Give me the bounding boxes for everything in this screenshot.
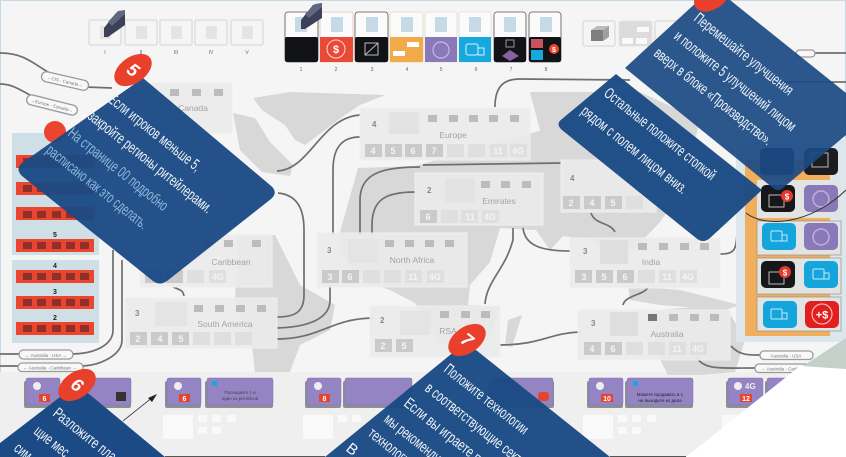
white corner and grey scrap [686, 338, 846, 457]
top track slots I-V: III [174, 50, 178, 56]
route labels: ←CIS - Canada→ [47, 75, 83, 88]
badge: step 7: 7 [457, 329, 478, 352]
top track slots I-V: V [245, 50, 249, 56]
region: India: 3 [583, 247, 588, 256]
production cards 1-8: 7 [510, 67, 513, 73]
badge: step 7 [442, 317, 492, 363]
region: North Africa [317, 233, 467, 287]
technology cards row: один из ретейлов [222, 395, 259, 401]
production cards 1-8 [285, 12, 561, 73]
region: RSA: RSA [439, 326, 457, 336]
production cards 1-8: 8 [545, 67, 548, 73]
region: India: 4G [682, 272, 694, 282]
region: Europe: 5 [390, 146, 396, 156]
panel: right upgrade board: +$ [816, 310, 828, 322]
region: South America: 4 [157, 334, 163, 344]
region: Europe: 4 [372, 120, 377, 129]
world map [233, 92, 745, 375]
production cards 1-8: 1 [300, 67, 303, 73]
panel: upgrades stack step [558, 74, 762, 241]
red circle marker [44, 121, 66, 143]
region: Europe: 7 [431, 146, 437, 156]
production cards 1-8: 3 [371, 67, 374, 73]
production cards 1-8: 2 [335, 67, 338, 73]
region: North Africa: 6 [347, 272, 353, 282]
region: India: 5 [601, 272, 607, 282]
route labels: Australia - USA [771, 354, 801, 358]
icon: dark cube on cards [301, 3, 322, 29]
production cards 1-8: $ [333, 44, 339, 56]
region: Asia: 5 [610, 198, 616, 208]
white slots under technology cards [163, 415, 752, 456]
panel: left retailer board [12, 121, 99, 343]
panel: step 7 [325, 342, 610, 457]
region: North Africa: 11 [408, 272, 418, 282]
panel: step 5: Если игроков меньше 5, [105, 91, 204, 175]
region: North Africa: North Africa [390, 255, 434, 265]
region: South America [125, 298, 277, 348]
technology cards row: 6 [43, 396, 47, 403]
badge: step 5: 5 [123, 59, 144, 82]
badge: step 6: 6 [67, 374, 88, 397]
technology cards row: Можете продавать в 1 [637, 392, 684, 397]
region: Australia: 3 [591, 319, 596, 328]
region: Australia: 11 [672, 344, 682, 354]
panel: step 5 [18, 78, 275, 284]
region: North Africa: 3 [327, 246, 332, 255]
route labels: ← Australia - USA → [25, 353, 67, 358]
retailer red bars: 5 [53, 232, 57, 239]
region: India: 6 [622, 272, 628, 282]
technology cards row: 6 [183, 396, 187, 403]
connector lines [0, 53, 846, 368]
badge: step 6 [52, 362, 102, 408]
region: South America: 5 [178, 334, 184, 344]
retailer red bars [16, 155, 94, 335]
technology cards row: 12 [742, 396, 750, 403]
region: Australia: 6 [610, 344, 616, 354]
panel: step 6 [0, 384, 165, 457]
route labels: ← Australia - Caribbean [761, 366, 809, 372]
panel: upgrades stack step: Остальные положите стопкой [601, 85, 719, 184]
region: RSA [370, 306, 500, 357]
region: Emirates: Emirates [482, 196, 516, 206]
bottom strip background [0, 372, 846, 457]
region: RSA: 2 [380, 341, 386, 351]
region: South America: 2 [135, 334, 141, 344]
panel: upgrades stack step: рядом с полем лицом вниз. [578, 103, 691, 198]
region: Europe: 6 [410, 146, 416, 156]
retailer red bars: 3 [53, 289, 57, 296]
region: Europe: 4 [370, 146, 376, 156]
region: South America: South America [197, 319, 253, 329]
retailer red bars: 2 [53, 315, 57, 322]
region: Europe: Europe [439, 130, 467, 140]
panel: upgrades shuffle step [625, 0, 846, 190]
region: Asia: 4 [570, 174, 575, 183]
region: Australia: 4G [692, 344, 704, 354]
badge: top right step [688, 0, 736, 18]
technology cards row: 10 [603, 396, 611, 403]
panel: step 5: расписано как это сделать. [43, 142, 151, 233]
top right upgrade slots [583, 21, 687, 46]
panel: right upgrade board [736, 140, 846, 342]
region: Emirates: 2 [427, 186, 432, 195]
region: Canada [150, 83, 232, 133]
region: Asia [561, 160, 656, 212]
retailer red bars: 4 [53, 263, 57, 270]
route labels [18, 50, 815, 372]
region: RSA: 5 [401, 341, 407, 351]
region: Australia: 4 [589, 344, 595, 354]
region: India [570, 238, 720, 288]
region: South America: 3 [135, 309, 140, 318]
production cards 1-8: $ [552, 47, 556, 54]
region: India: India [642, 257, 660, 267]
region: India: 11 [662, 272, 672, 282]
region: Europe [360, 108, 530, 160]
region: North Africa: 4G [429, 272, 441, 282]
technology cards row [24, 378, 803, 408]
region: Emirates: 4G [484, 212, 496, 222]
region: Australia: Australia [650, 329, 684, 339]
icon: dark cube on track [104, 10, 125, 37]
top track slots I-V: IV [209, 50, 214, 56]
panel: step 5: На странице 00 подробно [65, 125, 171, 215]
arrow [123, 394, 157, 421]
panel: right upgrade board: $ [783, 268, 788, 278]
technology cards row: 8 [323, 396, 327, 403]
region: Australia [578, 310, 730, 360]
production cards 1-8: 5 [440, 67, 443, 73]
region: Caribbean [140, 235, 272, 287]
route labels: ←Europe - Canada→ [30, 98, 73, 113]
technology cards row: Посещайте 1 и [224, 389, 256, 395]
region: Emirates: 6 [425, 212, 431, 222]
region: Europe: 11 [493, 146, 503, 156]
region: RSA: 2 [380, 316, 385, 325]
region: Asia: 4 [589, 198, 595, 208]
region: India: 3 [581, 272, 587, 282]
panel: step 5: закройте регионы ритейлерами. [85, 108, 216, 217]
top track slots I-V: I [104, 50, 106, 56]
top track slots I-V: II [140, 50, 142, 56]
region: North Africa: 3 [327, 272, 333, 282]
technology cards row: 4G [745, 382, 756, 391]
top track slots I-V [89, 20, 263, 56]
region: Caribbean: Caribbean [211, 257, 251, 267]
production cards 1-8: 4 [406, 67, 409, 73]
technology cards row: не выходите из дела [638, 398, 682, 403]
region: Canada: Canada [178, 103, 208, 113]
region: Emirates: 11 [465, 212, 475, 222]
panel: upgrades shuffle step: Перемешайте улучшения [691, 10, 797, 99]
production cards 1-8: 6 [475, 67, 478, 73]
badge: step 5 [108, 47, 158, 93]
region: Europe: 4G [512, 146, 524, 156]
region: Caribbean: 4G [212, 272, 224, 282]
panel: upgrades shuffle step: вверх в блоке «Производство». [651, 45, 775, 149]
route labels: ← Australia - Caribbean → [23, 366, 77, 370]
region: Emirates [415, 173, 543, 225]
panel: right upgrade board: $ [785, 192, 790, 202]
region: Asia: 2 [568, 198, 574, 208]
